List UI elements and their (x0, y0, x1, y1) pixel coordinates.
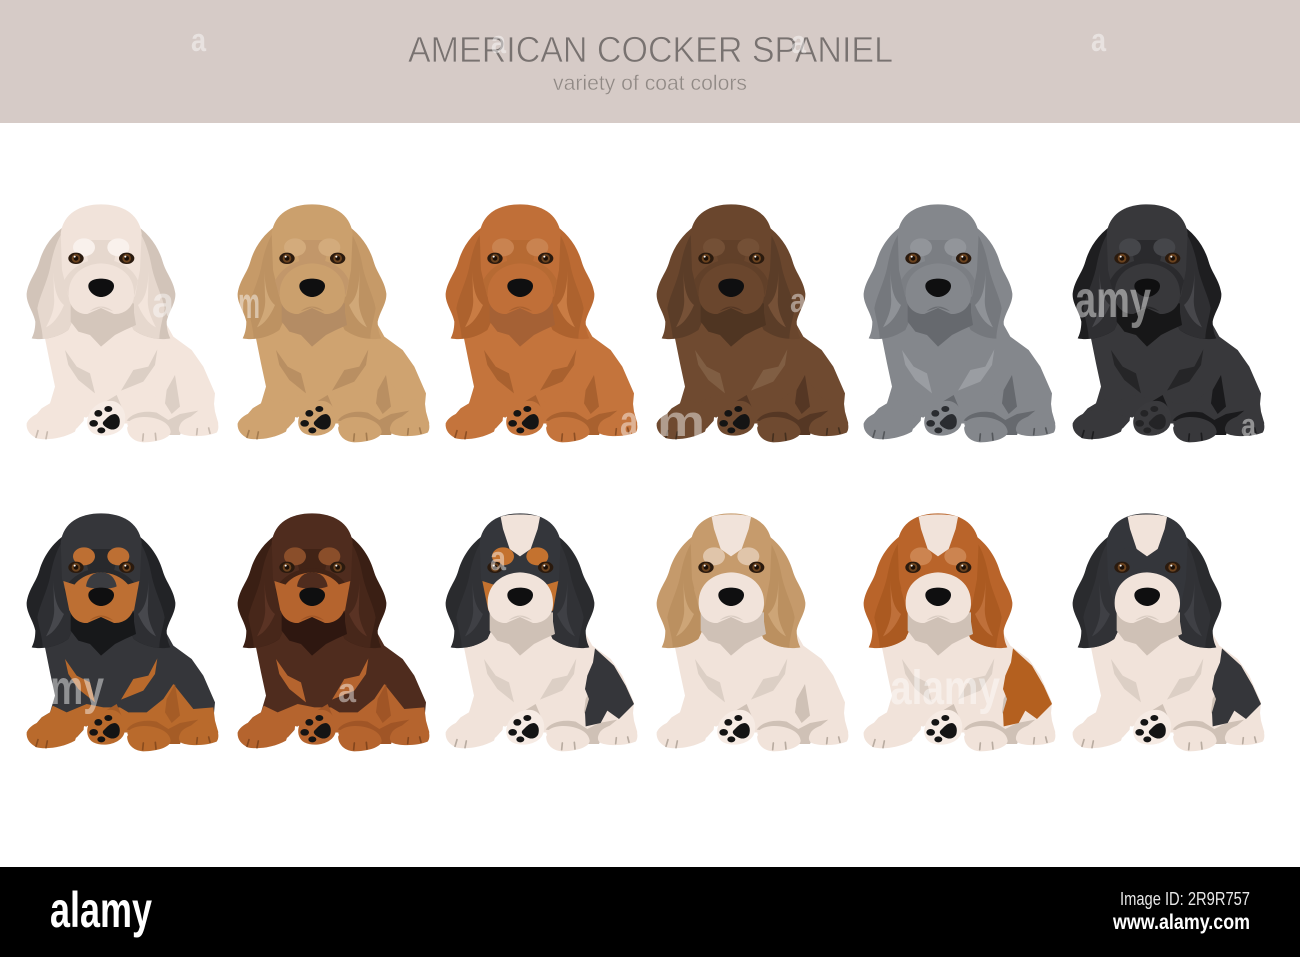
website: www.alamy.com (1112, 911, 1250, 934)
title: AMERICAN COCKER SPANIEL (408, 29, 893, 70)
logo: alamy: alamy (50, 882, 152, 938)
puppy: black and tan (27, 513, 218, 751)
watermarks: a (490, 540, 507, 578)
watermarks: a (1241, 407, 1256, 443)
watermarks: amy (1075, 271, 1151, 329)
watermarks (50, 22, 1256, 715)
watermarks: a (790, 282, 807, 320)
watermarks: a (152, 278, 174, 327)
watermarks: a (491, 24, 506, 60)
watermarks: alamy (890, 662, 1000, 715)
puppy: red (446, 204, 637, 442)
watermarks: a (1091, 22, 1106, 58)
puppy: black tricolor (446, 513, 637, 751)
watermarks: a (338, 672, 357, 710)
watermarks: my (50, 662, 104, 715)
puppy: tan parti (657, 513, 848, 751)
puppy: grey (864, 204, 1055, 442)
watermarks: a (620, 397, 638, 446)
puppy: black (1073, 204, 1264, 442)
puppy: brown and tan (238, 513, 429, 751)
watermarks: a (191, 22, 206, 58)
header band (0, 0, 1300, 123)
puppy: tan (238, 204, 429, 442)
watermarks: m (238, 279, 260, 328)
puppy: cream (27, 204, 218, 442)
watermarks: a (791, 24, 806, 60)
puppy: red parti (864, 513, 1055, 751)
footer band (0, 867, 1300, 957)
watermarks: m (657, 397, 705, 446)
subtitle: variety of coat colors (553, 72, 747, 95)
puppy: black parti (1073, 513, 1264, 751)
puppy: brown (657, 204, 848, 442)
image id: Image ID: 2R9R757 (1120, 889, 1250, 909)
